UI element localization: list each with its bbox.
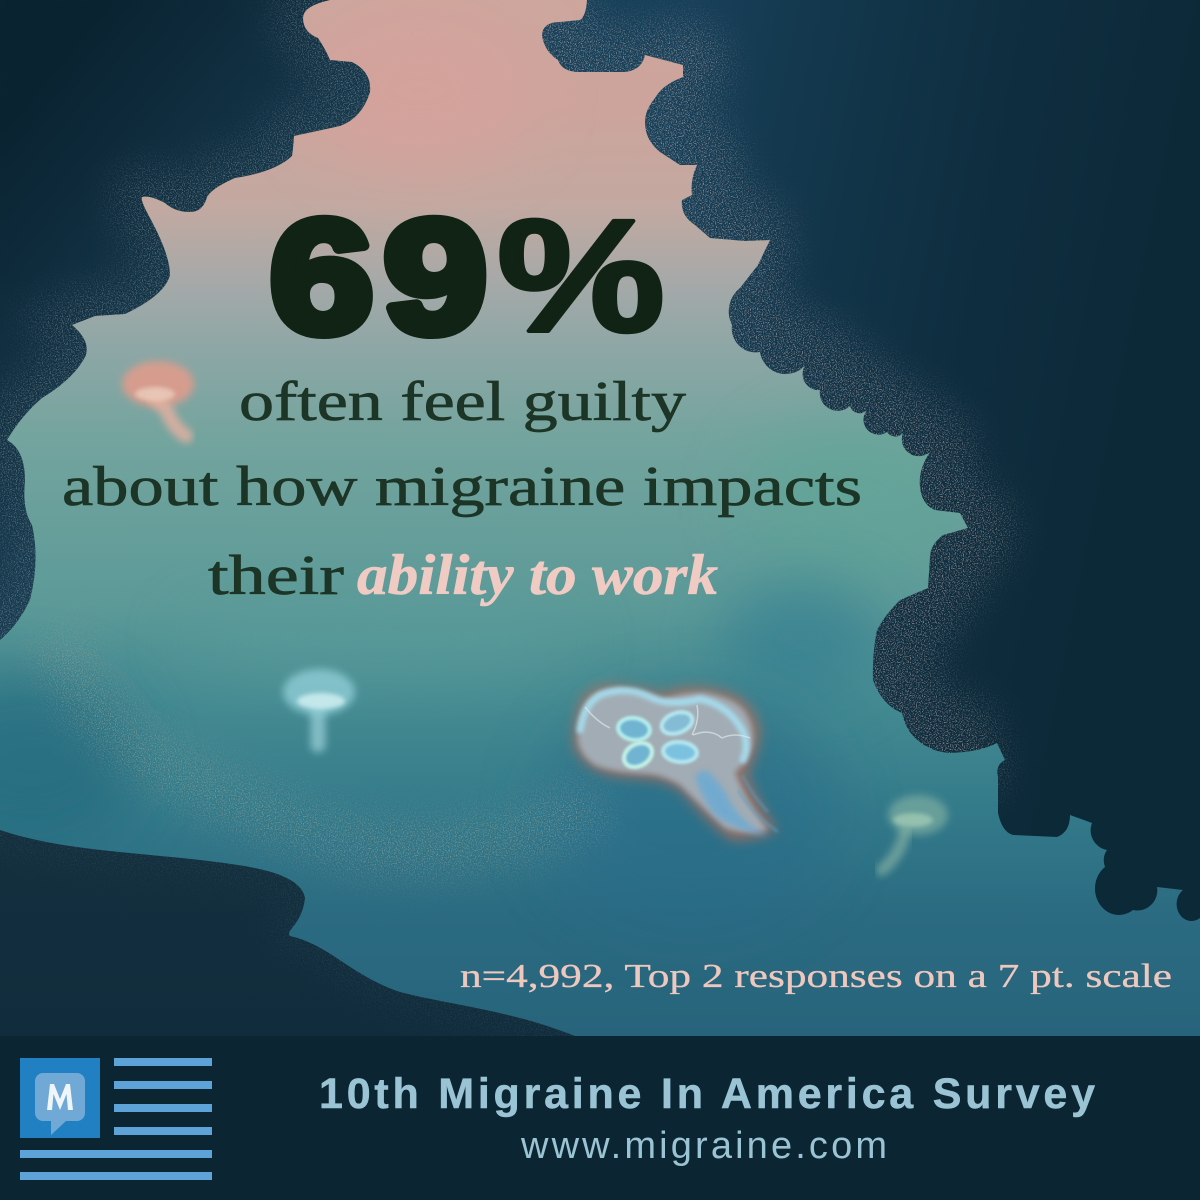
line 1: often feel guilty: [239, 371, 686, 433]
dark rock: bottom left: [0, 830, 575, 1036]
line 2: about how migraine impacts: [62, 456, 862, 518]
jellyfish: large coral-rimmed: [573, 685, 778, 840]
logo: flag with speech bubble: [20, 1058, 212, 1180]
footer title: 10th Migraine In America Survey: [319, 1070, 1095, 1118]
emphasis: ability to work: ability to work: [357, 544, 719, 607]
footer band: [0, 1036, 1200, 1200]
percent sign: %: [497, 186, 665, 365]
digits: 69: [270, 187, 487, 366]
line 3: their: [208, 545, 344, 607]
dark rock: right side: [542, 0, 1200, 930]
jellyfish: small pale blue, centre: [283, 669, 355, 745]
big statistic: [270, 186, 665, 366]
jellyfish: small coral, upper left: [122, 361, 194, 436]
sample size note: n=4,992, Top 2 responses on a 7 pt. scale: [460, 958, 1172, 995]
dark rock: upper left: [0, 0, 370, 660]
statement text: [62, 371, 862, 607]
footer url: www.migraine.com: [520, 1125, 887, 1167]
grainy pale band, lower left: [55, 630, 600, 848]
jellyfish: small pale green, lower right: [882, 795, 948, 870]
